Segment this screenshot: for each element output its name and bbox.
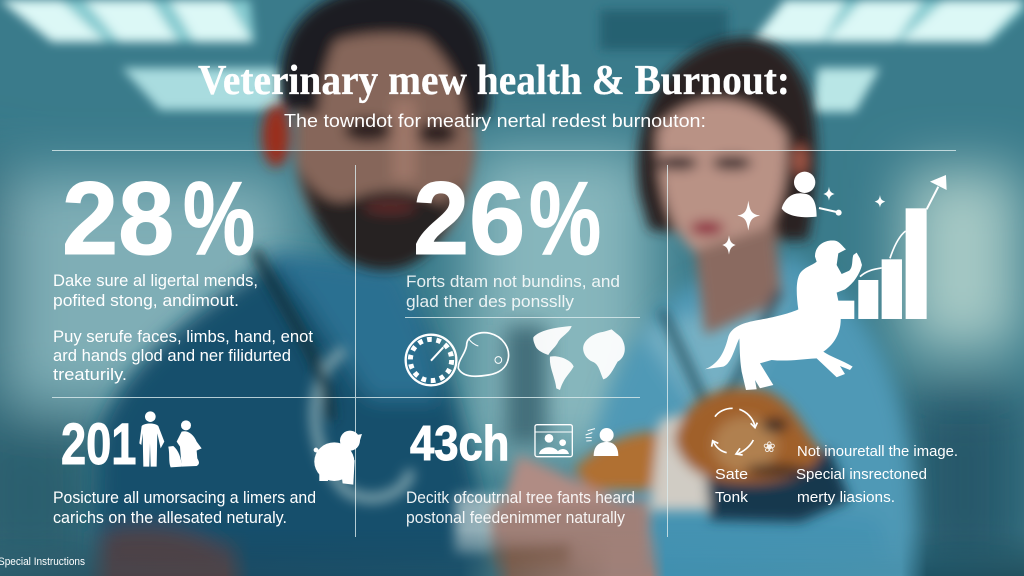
icon: speaking person (586, 428, 618, 456)
text block: 26% description: glad ther des ponsslly (406, 292, 575, 311)
dog and hands (490, 388, 850, 576)
text block: 2011 description: Posicture all umorsacing a limers and (53, 488, 316, 507)
panel: stat 28% (53, 160, 313, 384)
text block: 28% description: treaturily. (53, 365, 127, 384)
text block: left labels: Sate (715, 466, 748, 483)
number 43ch: 43ch (410, 416, 509, 471)
text block: 28% description: Puy serufe faces, limbs, hand, enot (53, 327, 313, 346)
title: Veterinary mew health & Burnout: (198, 58, 790, 104)
text block: 28% description: pofited stong, andimout. (53, 291, 239, 310)
icon: standing person (139, 411, 164, 467)
ceiling lights (0, 0, 1024, 112)
text block: 26% description: Forts dtam not bundins, and (406, 272, 620, 291)
icon: person with dog (168, 420, 202, 467)
text block: 43ch description: Decitk ofcoutrnal tree fants heard (406, 488, 635, 507)
text block: 43ch description: postonal feedenimmer naturally (406, 508, 625, 527)
text block: left labels: Tonk (715, 489, 749, 506)
icon: world map (533, 326, 625, 390)
bar chart with arrow (837, 175, 947, 319)
text block: right note (796, 443, 958, 506)
bottom edge colour (0, 530, 1024, 576)
icon: small flower: ❀ (763, 438, 776, 456)
panel: stat 2011 (53, 411, 316, 527)
number 28%: % (183, 160, 255, 276)
icon: dog silhouette (314, 431, 362, 485)
text block: 28% description (53, 271, 313, 384)
panel: stat 43ch (406, 416, 635, 527)
distant person (505, 325, 547, 445)
icon: person with connector (782, 172, 842, 217)
icon: sparkles (722, 187, 885, 255)
text block: right note: merty liasions. (797, 489, 895, 506)
panel: bottom right notes (712, 408, 958, 506)
number 28%: 28 (62, 160, 174, 276)
text block: 28% description: ard hands glod and ner filidurted (53, 346, 291, 365)
number 28% (62, 160, 255, 276)
icon: cycle arrows (712, 408, 757, 455)
woman (580, 255, 916, 576)
panel: centaur and growth chart icons (705, 172, 947, 390)
text block: 43ch description (406, 488, 635, 527)
text block: 28% description: Dake sure al ligertal mends, (53, 271, 258, 290)
icon: gauge and brain (406, 333, 509, 385)
footer note: Special Instructions (0, 556, 85, 568)
text block: 26% description (406, 272, 620, 311)
subtitle: The towndot for meatiry nertal redest burnouton: (284, 111, 706, 131)
text block: 2011 description: carichs on the allesated neturaly. (53, 508, 287, 527)
number 26%: 26 (413, 160, 525, 276)
text block: right note: Special insrectoned (796, 466, 927, 483)
panel: stat 26% (406, 160, 625, 390)
number 201: 201 (61, 413, 136, 477)
text block: left labels (715, 466, 749, 506)
icon: centaur (705, 240, 862, 390)
man (95, 250, 495, 576)
number 26% (413, 160, 601, 276)
icon: video call window (535, 425, 572, 457)
text block: right note: Not inouretall the image. (797, 443, 958, 460)
dividers (52, 150, 956, 537)
number 26%: % (529, 160, 601, 276)
text block: 2011 description (53, 488, 316, 527)
